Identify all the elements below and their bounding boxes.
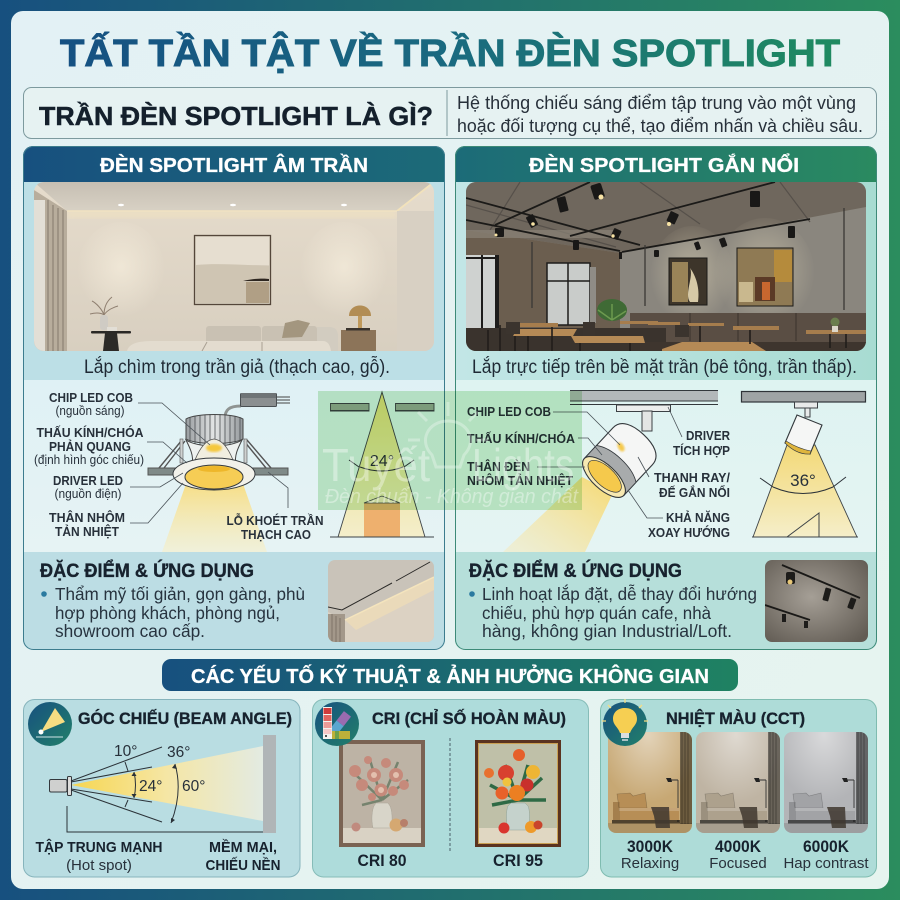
card heading: CRI (CHỈ SỐ HOÀN MÀU)	[372, 708, 566, 728]
callouts: track fixture: THẤU KÍNH/CHÓA	[467, 431, 576, 446]
label: 6000K: Hap contrast	[783, 855, 869, 872]
photo: 4000K room	[690, 700, 782, 833]
callouts: track fixture: NHÔM TẢN NHIỆT	[467, 473, 573, 488]
icon: light bulb	[602, 699, 648, 746]
painting: CRI 95	[475, 740, 561, 847]
features text: Linh hoạt lắp đặt, dễ thay đổi hướng	[482, 583, 757, 604]
label: 4000K: 4000K	[715, 838, 761, 856]
callouts: recessed fixture: TẢN NHIỆT	[55, 524, 119, 539]
callouts: recessed fixture: PHẢN QUANG	[49, 439, 131, 454]
thumbnail: cove ceiling	[328, 560, 434, 642]
label: 4000K: Focused	[709, 855, 767, 872]
section banner	[162, 659, 738, 691]
photo: living room	[34, 182, 434, 351]
callouts: track fixture: THANH RAY/	[654, 470, 730, 485]
features text: showroom cao cấp.	[55, 621, 205, 641]
card: colour temperature	[600, 699, 876, 877]
chart: beam angles: 24°	[139, 778, 162, 795]
callouts: recessed fixture: LỖ KHOÉT TRẦN	[226, 513, 324, 528]
callouts: track fixture	[467, 404, 731, 540]
card: beam angle	[24, 700, 300, 877]
dashed divider	[449, 738, 451, 851]
photo: 3000K room	[602, 700, 694, 833]
card heading: GÓC CHIẾU (BEAM ANGLE)	[78, 709, 292, 728]
callouts: track fixture: XOAY HƯỚNG	[648, 525, 730, 540]
diagram: 36 degree cone	[742, 392, 866, 537]
features text: chiếu, phù hợp quán cafe, nhà	[482, 603, 711, 623]
features heading: ĐẶC ĐIỂM & ỨNG DỤNG	[469, 560, 682, 582]
diagram: 24 degree cone: 24°	[370, 453, 394, 470]
photo caption: Lắp chìm trong trần giả (thạch cao, gỗ).	[84, 356, 390, 378]
chart: beam angles: 10°	[114, 743, 137, 760]
callouts: track fixture: DRIVER	[686, 428, 731, 443]
label: 6000K: 6000K	[803, 838, 849, 856]
panel: surface-mounted spotlight	[455, 146, 877, 650]
watermark: Lights	[472, 439, 574, 491]
label: hot spot: (Hot spot)	[66, 857, 132, 874]
chart: beam angles: 36°	[167, 744, 190, 761]
diagram: 36 degree cone: 36°	[790, 471, 816, 490]
panel: recessed spotlight	[23, 146, 445, 650]
definition heading: TRẦN ĐÈN SPOTLIGHT LÀ GÌ?	[39, 101, 433, 131]
definition text: Hệ thống chiếu sáng điểm tập trung vào một vùng	[457, 93, 856, 113]
callouts: track fixture: CHIP LED COB	[467, 404, 551, 419]
label: 3000K: Relaxing	[621, 855, 679, 872]
photo: 6000K room	[778, 700, 870, 833]
callouts: track fixture: KHẢ NĂNG	[666, 510, 730, 525]
callouts: recessed fixture: THẤU KÍNH/CHÓA	[36, 425, 144, 440]
chart: beam angles	[50, 735, 276, 833]
panel heading: ĐÈN SPOTLIGHT ÂM TRẦN	[100, 153, 368, 177]
callouts: track fixture: TÍCH HỢP	[673, 443, 730, 458]
label: soft wash: CHIẾU NỀN	[206, 857, 280, 874]
definition text: hoặc đối tượng cụ thể, tạo điểm nhấn và chiều sâu.	[457, 116, 863, 136]
title: TẤT TẦN TẬT VỀ TRẦN ĐÈN SPOTLIGHT	[60, 31, 840, 75]
diagram: track fixture	[467, 390, 731, 552]
callouts: recessed fixture: (nguồn sáng)	[56, 404, 124, 418]
label: hot spot	[36, 838, 162, 874]
callouts: recessed fixture: CHIP LED COB	[49, 390, 133, 405]
features text: hàng, không gian Industrial/Loft.	[482, 621, 732, 641]
label: 3000K: 3000K	[627, 838, 673, 856]
chart: beam angles: 60°	[182, 778, 205, 795]
watermark: Đèn chuẩn - Không gian chất	[325, 486, 579, 508]
card: CRI	[312, 700, 588, 877]
label: 3000K	[621, 838, 679, 872]
card heading: NHIỆT MÀU (CCT)	[666, 709, 805, 728]
photo caption: Lắp trực tiếp trên bề mặt trần (bê tông, trần thấp).	[472, 356, 857, 378]
icon: colour fan	[315, 702, 359, 746]
callouts: recessed fixture: (định hình góc chiếu)	[34, 453, 144, 467]
watermark: Tuyết	[322, 439, 430, 491]
features heading: ĐẶC ĐIỂM & ỨNG DỤNG	[40, 560, 254, 582]
painting: CRI 80	[339, 740, 425, 847]
thumbnail: concrete track	[765, 560, 868, 642]
panel heading: ĐÈN SPOTLIGHT GẮN NỔI	[529, 153, 799, 177]
features section	[469, 560, 868, 642]
callouts: track fixture: THÂN ĐÈN	[467, 459, 530, 474]
callouts: recessed fixture: (nguồn điện)	[54, 487, 122, 501]
watermark	[318, 391, 582, 510]
label: CRI 80: CRI 80	[358, 851, 406, 870]
features text: hợp phòng khách, phòng ngủ,	[55, 603, 280, 623]
label: CRI 95: CRI 95	[493, 851, 543, 870]
icon: beam	[28, 702, 72, 746]
label: soft wash	[206, 839, 280, 874]
callouts: recessed fixture	[34, 390, 324, 542]
definition box	[24, 88, 876, 138]
callouts: recessed fixture: THÂN NHÔM	[49, 510, 125, 525]
photo: cafe	[466, 182, 866, 351]
features text: Thẩm mỹ tối giản, gọn gàng, phù	[55, 584, 305, 604]
label: 4000K	[709, 838, 767, 872]
label: hot spot: TẬP TRUNG MẠNH	[36, 838, 162, 856]
features section	[40, 560, 434, 642]
section banner: CÁC YẾU TỐ KỸ THUẬT & ẢNH HƯỞNG KHÔNG GIAN	[191, 664, 709, 688]
callouts: recessed fixture: DRIVER LED	[53, 473, 123, 488]
callouts: recessed fixture: THẠCH CAO	[241, 527, 311, 542]
callouts: track fixture: ĐẾ GẮN NỔI	[659, 485, 730, 500]
diagram: recessed fixture	[34, 390, 324, 552]
label: soft wash: MỀM MẠI,	[209, 839, 277, 856]
diagram: 24 degree cone	[330, 392, 434, 537]
label: 6000K	[783, 838, 869, 872]
